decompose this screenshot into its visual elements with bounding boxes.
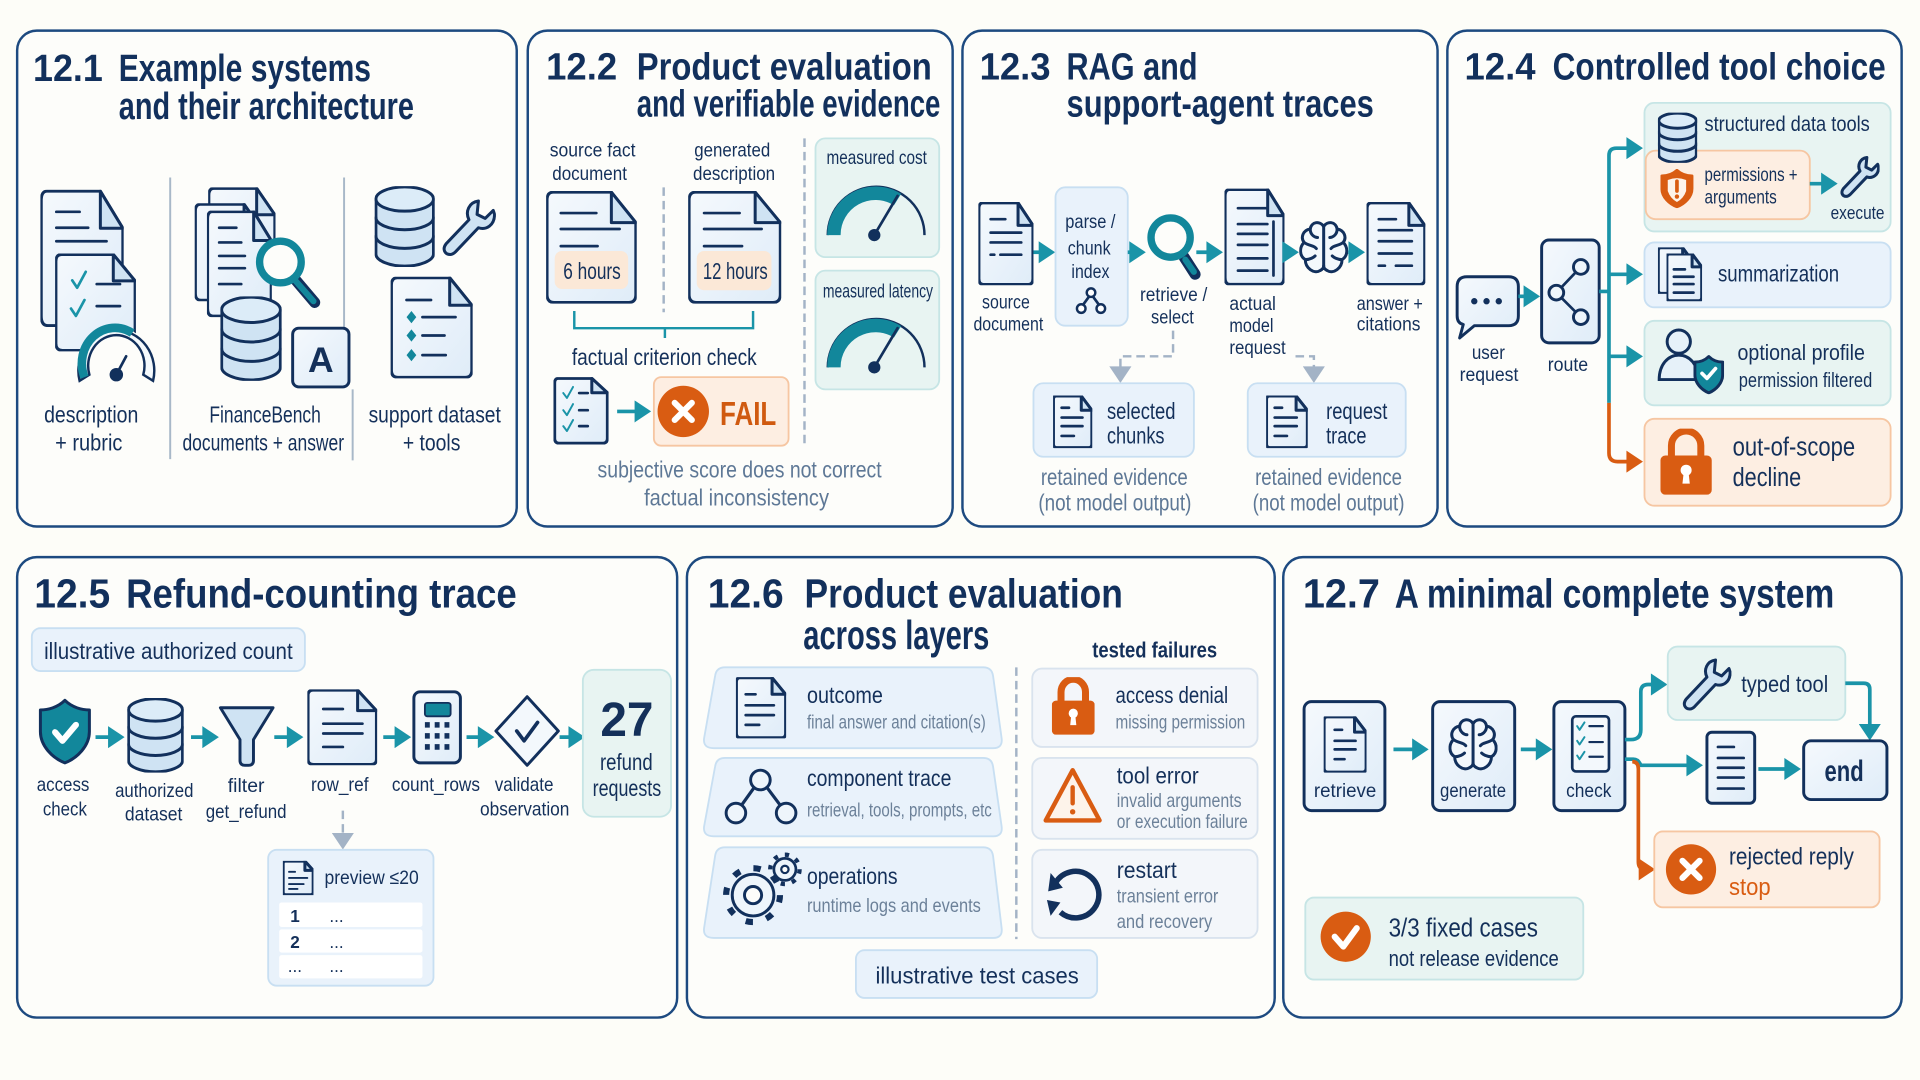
- arrow: [467, 736, 486, 739]
- card: parse chunk index: parse /: [1065, 211, 1116, 233]
- badge: illustrative test cases: illustrative test cases: [876, 962, 1079, 988]
- sub-card: permissions + arguments: permissions +: [1704, 165, 1798, 186]
- card: measured cost gauge: [816, 138, 939, 257]
- heading 12.3: [980, 47, 1374, 125]
- card: parse chunk index: [1056, 187, 1128, 326]
- arrow to typed tool: [1625, 684, 1659, 740]
- label: generated description: [693, 140, 775, 185]
- card: 27 refund requests: refund: [600, 749, 653, 775]
- arrow: [1521, 748, 1544, 751]
- card: preview table: ...: [329, 906, 344, 926]
- badge: illustrative test cases: [856, 950, 1097, 998]
- card: 27 refund requests: requests: [593, 775, 661, 801]
- icon: FinanceBench documents, magnifier, database and answer: [195, 188, 349, 387]
- card: 3/3 fixed cases: 3/3 fixed cases: [1389, 915, 1538, 943]
- card: preview table: [268, 850, 433, 986]
- card: preview table: ...: [288, 956, 302, 976]
- icon: FinanceBench documents, magnifier, database and answer: A: [308, 340, 334, 380]
- node: check: check: [1566, 780, 1612, 802]
- arrow: [560, 736, 577, 739]
- arrow: [1128, 251, 1138, 254]
- card: operations: [704, 847, 1002, 938]
- card: operations: operations: [807, 863, 898, 889]
- arrow to document: [1625, 759, 1695, 765]
- label: answer + citations: citations: [1357, 314, 1421, 336]
- card: preview table: 1: [290, 906, 300, 926]
- card: structured data tools: [1644, 103, 1891, 231]
- icon: support database, wrench and tool list: [376, 187, 495, 377]
- card: summarization: summarization: [1718, 261, 1839, 287]
- heading 12.7: A minimal complete system: [1395, 570, 1834, 616]
- card: request trace: [1248, 383, 1406, 457]
- label: actual model request: request: [1229, 337, 1286, 359]
- label: retrieve / select: retrieve /: [1140, 284, 1208, 306]
- note: retained evidence right: retained evidence: [1255, 464, 1402, 490]
- arrow: [1284, 251, 1291, 254]
- card: out-of-scope decline: out-of-scope: [1733, 434, 1855, 462]
- heading 12.2: 12.2: [546, 47, 617, 89]
- arrow to rejected reply: [1632, 762, 1647, 869]
- card: measured cost gauge: measured cost: [827, 147, 927, 169]
- label: count_rows: count_rows: [392, 774, 480, 796]
- dashed arrow to selected chunks: [1120, 331, 1173, 375]
- label: source fact document: source fact: [550, 140, 636, 162]
- card: 3/3 fixed cases: not release evidence: [1389, 946, 1559, 971]
- card: restart: transient error: [1117, 885, 1219, 907]
- heading 12.3: support-agent traces: [1067, 83, 1374, 125]
- label: factual criterion check: factual criterion check: [572, 344, 757, 370]
- arrow: [1758, 767, 1793, 770]
- label: description + rubric: description: [44, 401, 138, 427]
- heading 12.2: and verifiable evidence: [637, 83, 940, 125]
- arrow: [383, 736, 403, 739]
- label: retrieve / select: select: [1151, 306, 1194, 328]
- heading 12.6: across layers: [803, 612, 989, 658]
- dashed arrow to request trace: [1296, 356, 1314, 375]
- note: retained evidence right: [1253, 464, 1404, 516]
- panel: 12.7 a minimal complete system: [1283, 557, 1902, 1018]
- label: retrieve / select: [1140, 284, 1208, 328]
- heading 12.6: Product evaluation: [804, 570, 1123, 616]
- card: structured data tools: execute: [1831, 202, 1884, 223]
- label: generated description: generated: [694, 140, 770, 162]
- arrow: [1348, 251, 1357, 254]
- icon: route node: [1542, 240, 1599, 343]
- heading 12.1: [33, 48, 414, 128]
- arrow: [1393, 748, 1420, 751]
- panel: 12.2 product evaluation and verifiable evidence: [528, 31, 953, 527]
- label: access check: [37, 774, 90, 821]
- card: outcome: outcome: [807, 682, 883, 708]
- node: retrieve: [1304, 702, 1385, 811]
- card: structured data tools: structured data tools: [1704, 113, 1870, 136]
- label: actual model request: [1229, 293, 1286, 359]
- label: authorized dataset: dataset: [125, 803, 183, 825]
- label: source document: document: [973, 314, 1044, 336]
- label: user request: [1460, 342, 1519, 386]
- document: generated description, 12 hours: [689, 192, 780, 303]
- panel: 12.6 product evaluation across layers: [687, 557, 1275, 1018]
- note: retained evidence right: (not model output): [1253, 490, 1404, 516]
- heading 12.5: Refund-counting trace: [126, 570, 517, 616]
- arrow to fail: [617, 410, 643, 413]
- sub-card: permissions + arguments: arguments: [1704, 187, 1777, 208]
- arrow: [274, 736, 295, 739]
- note: retained evidence left: (not model output): [1038, 490, 1191, 516]
- label: source document: [973, 292, 1044, 336]
- panel: 12.4 controlled tool choice: [1447, 31, 1902, 527]
- document: generated description, 12 hours: 12 hours: [703, 258, 768, 284]
- card: rejected reply stop: rejected reply: [1729, 843, 1855, 870]
- card: selected chunks: [1033, 383, 1194, 457]
- card: 3/3 fixed cases: [1305, 898, 1583, 980]
- label: FinanceBench documents + answer: documents + answer: [182, 430, 344, 456]
- card: operations: runtime logs and events: [807, 895, 981, 917]
- card: tool error: [1032, 758, 1258, 839]
- label: user request: request: [1460, 364, 1519, 386]
- node: generate: [1433, 702, 1515, 811]
- icon: source document: [979, 203, 1033, 284]
- arrow: [1196, 251, 1215, 254]
- card: restart: restart: [1117, 857, 1177, 883]
- label: validate observation: [480, 774, 569, 821]
- heading 12.5: 12.5: [34, 570, 110, 616]
- card: request trace: trace: [1326, 422, 1367, 448]
- icon: shield: [40, 700, 89, 763]
- card: selected chunks: selected: [1107, 398, 1176, 424]
- card: measured latency gauge: measured latency: [823, 281, 933, 303]
- card: measured latency gauge: [816, 271, 939, 389]
- heading 12.1: 12.1: [33, 48, 103, 90]
- node: end: end: [1824, 755, 1864, 788]
- icon: calculator: [414, 692, 460, 763]
- card: preview table: ...: [329, 956, 344, 976]
- icon: answer document: [1367, 203, 1425, 284]
- icon: magnifier: [1151, 218, 1195, 274]
- note: subjective score: subjective score does not correct: [598, 457, 882, 483]
- label: access check: check: [43, 799, 87, 821]
- card: out-of-scope decline: decline: [1733, 464, 1801, 492]
- dashed arrow to preview: [342, 811, 344, 841]
- card: preview table: preview ≤20: [324, 867, 419, 889]
- panel: 12.5 refund-counting trace: [17, 557, 677, 1018]
- label: source document: source: [982, 292, 1030, 314]
- label: filter get_refund: [206, 775, 287, 823]
- card: optional profile: optional profile: [1738, 340, 1865, 365]
- card: preview table: 2: [290, 932, 300, 952]
- document: source fact, 6 hours: [547, 192, 636, 303]
- label: user request: user: [1472, 342, 1505, 364]
- card: restart: [1032, 850, 1258, 938]
- icon: funnel: [220, 708, 273, 765]
- label: description + rubric: + rubric: [55, 430, 122, 456]
- label: filter get_refund: filter: [228, 775, 265, 797]
- card: access denial: missing permission: [1116, 712, 1245, 734]
- label: support dataset + tools: support dataset: [369, 401, 501, 427]
- card: optional profile: permission filtered: [1739, 370, 1872, 392]
- label: answer + citations: [1357, 293, 1423, 336]
- card: rejected reply stop: stop: [1729, 874, 1771, 901]
- label: description + rubric: [44, 401, 138, 456]
- label: actual model request: actual: [1229, 293, 1276, 315]
- heading 12.1: and their architecture: [119, 86, 414, 128]
- card: parse chunk index: chunk: [1068, 238, 1111, 260]
- card: component trace: component trace: [807, 765, 951, 791]
- arrow to end: [1845, 683, 1870, 732]
- label: FinanceBench documents + answer: FinanceBench: [209, 401, 321, 427]
- card: selected chunks: chunks: [1107, 422, 1164, 448]
- node: retrieve: retrieve: [1314, 780, 1376, 802]
- card: preview table: ...: [329, 932, 344, 952]
- label: validate observation: validate: [495, 774, 554, 796]
- heading 12.6: 12.6: [708, 570, 784, 616]
- label: filter get_refund: get_refund: [206, 801, 287, 823]
- node: check: [1554, 702, 1625, 811]
- card: summarization: [1644, 242, 1891, 307]
- icon: checklist: [555, 378, 607, 443]
- heading 12.3: RAG and: [1067, 47, 1198, 89]
- arrows: routing branches: [1599, 148, 1635, 462]
- card: tool error: tool error: [1117, 763, 1199, 789]
- icon: actual model request document: [1225, 190, 1284, 284]
- card: typed tool: [1668, 647, 1845, 720]
- icon: database: [128, 699, 183, 772]
- card: component trace: [704, 758, 1002, 836]
- card: restart: and recovery: [1117, 911, 1212, 933]
- card: out-of-scope decline: [1644, 419, 1891, 506]
- note: subjective score: factual inconsistency: [644, 485, 830, 511]
- icon: brain: [1301, 223, 1347, 272]
- label: validate observation: observation: [480, 799, 569, 821]
- label: tested failures: tested failures: [1092, 638, 1217, 663]
- arrow: [191, 736, 211, 739]
- heading 12.3: 12.3: [980, 47, 1051, 89]
- label: FinanceBench documents + answer: [182, 401, 344, 456]
- callout: FAIL: FAIL: [720, 396, 776, 433]
- heading 12.2: [546, 47, 940, 125]
- badge: illustrative authorized count: [32, 628, 305, 671]
- card: component trace: retrieval, tools, prompts, etc: [807, 800, 992, 822]
- heading 12.2: Product evaluation: [637, 47, 932, 89]
- label: authorized dataset: authorized: [115, 780, 193, 802]
- label: access check: access: [37, 774, 90, 796]
- label: source fact document: [550, 140, 636, 185]
- icon: output document: [1707, 732, 1755, 803]
- panel: 12.1 example systems: [17, 31, 517, 527]
- heading 12.7: 12.7: [1303, 570, 1380, 616]
- card: typed tool: typed tool: [1741, 671, 1828, 697]
- arrow: [1518, 295, 1532, 298]
- panel: 12.3 RAG and support-agent traces: [962, 31, 1438, 527]
- label: actual model request: model: [1229, 315, 1273, 337]
- card: parse chunk index: index: [1071, 261, 1110, 283]
- label: route: route: [1548, 354, 1588, 376]
- heading 12.4: 12.4: [1464, 47, 1536, 89]
- arrow: [1033, 251, 1047, 254]
- card: access denial: access denial: [1116, 682, 1228, 708]
- label: support dataset + tools: + tools: [403, 430, 460, 456]
- label: answer + citations: answer +: [1357, 293, 1423, 315]
- node: end: [1804, 741, 1887, 800]
- label: row_ref: row_ref: [311, 774, 369, 796]
- card: request trace: request: [1326, 398, 1388, 424]
- heading 12.6: [708, 570, 1123, 658]
- heading 12.1: Example systems: [119, 48, 371, 90]
- arrow: [96, 736, 116, 739]
- card: 27 refund requests: 27: [600, 694, 654, 747]
- document: source fact, 6 hours: 6 hours: [563, 258, 621, 284]
- card: outcome: final answer and citation(s): [807, 712, 986, 734]
- card: rejected reply stop: [1654, 831, 1880, 907]
- label: generated description: description: [693, 163, 775, 185]
- icon: row_ref document: [308, 690, 376, 765]
- note: retained evidence left: retained evidence: [1041, 464, 1188, 490]
- note: retained evidence left: [1038, 464, 1191, 516]
- card: access denial: [1032, 669, 1258, 747]
- node: generate: generate: [1440, 780, 1506, 802]
- card: optional profile: [1644, 321, 1891, 405]
- icon: user request speech bubble: [1457, 277, 1518, 338]
- badge: illustrative authorized count: illustrative authorized count: [44, 638, 293, 664]
- label: source fact document: document: [552, 163, 627, 185]
- card: 27 refund requests: [583, 670, 671, 817]
- note: subjective score: [598, 457, 882, 511]
- card: tool error: invalid arguments: [1117, 790, 1242, 812]
- sub-card: permissions + arguments: [1646, 151, 1810, 219]
- icon: description and rubric documents with gauge: [41, 191, 154, 403]
- card: outcome: [704, 667, 1002, 748]
- callout: FAIL: [654, 377, 789, 446]
- card: tool error: or execution failure: [1117, 811, 1248, 833]
- label: support dataset + tools: [369, 401, 501, 456]
- label: authorized dataset: [115, 780, 193, 825]
- icon: validation diamond: [496, 697, 558, 765]
